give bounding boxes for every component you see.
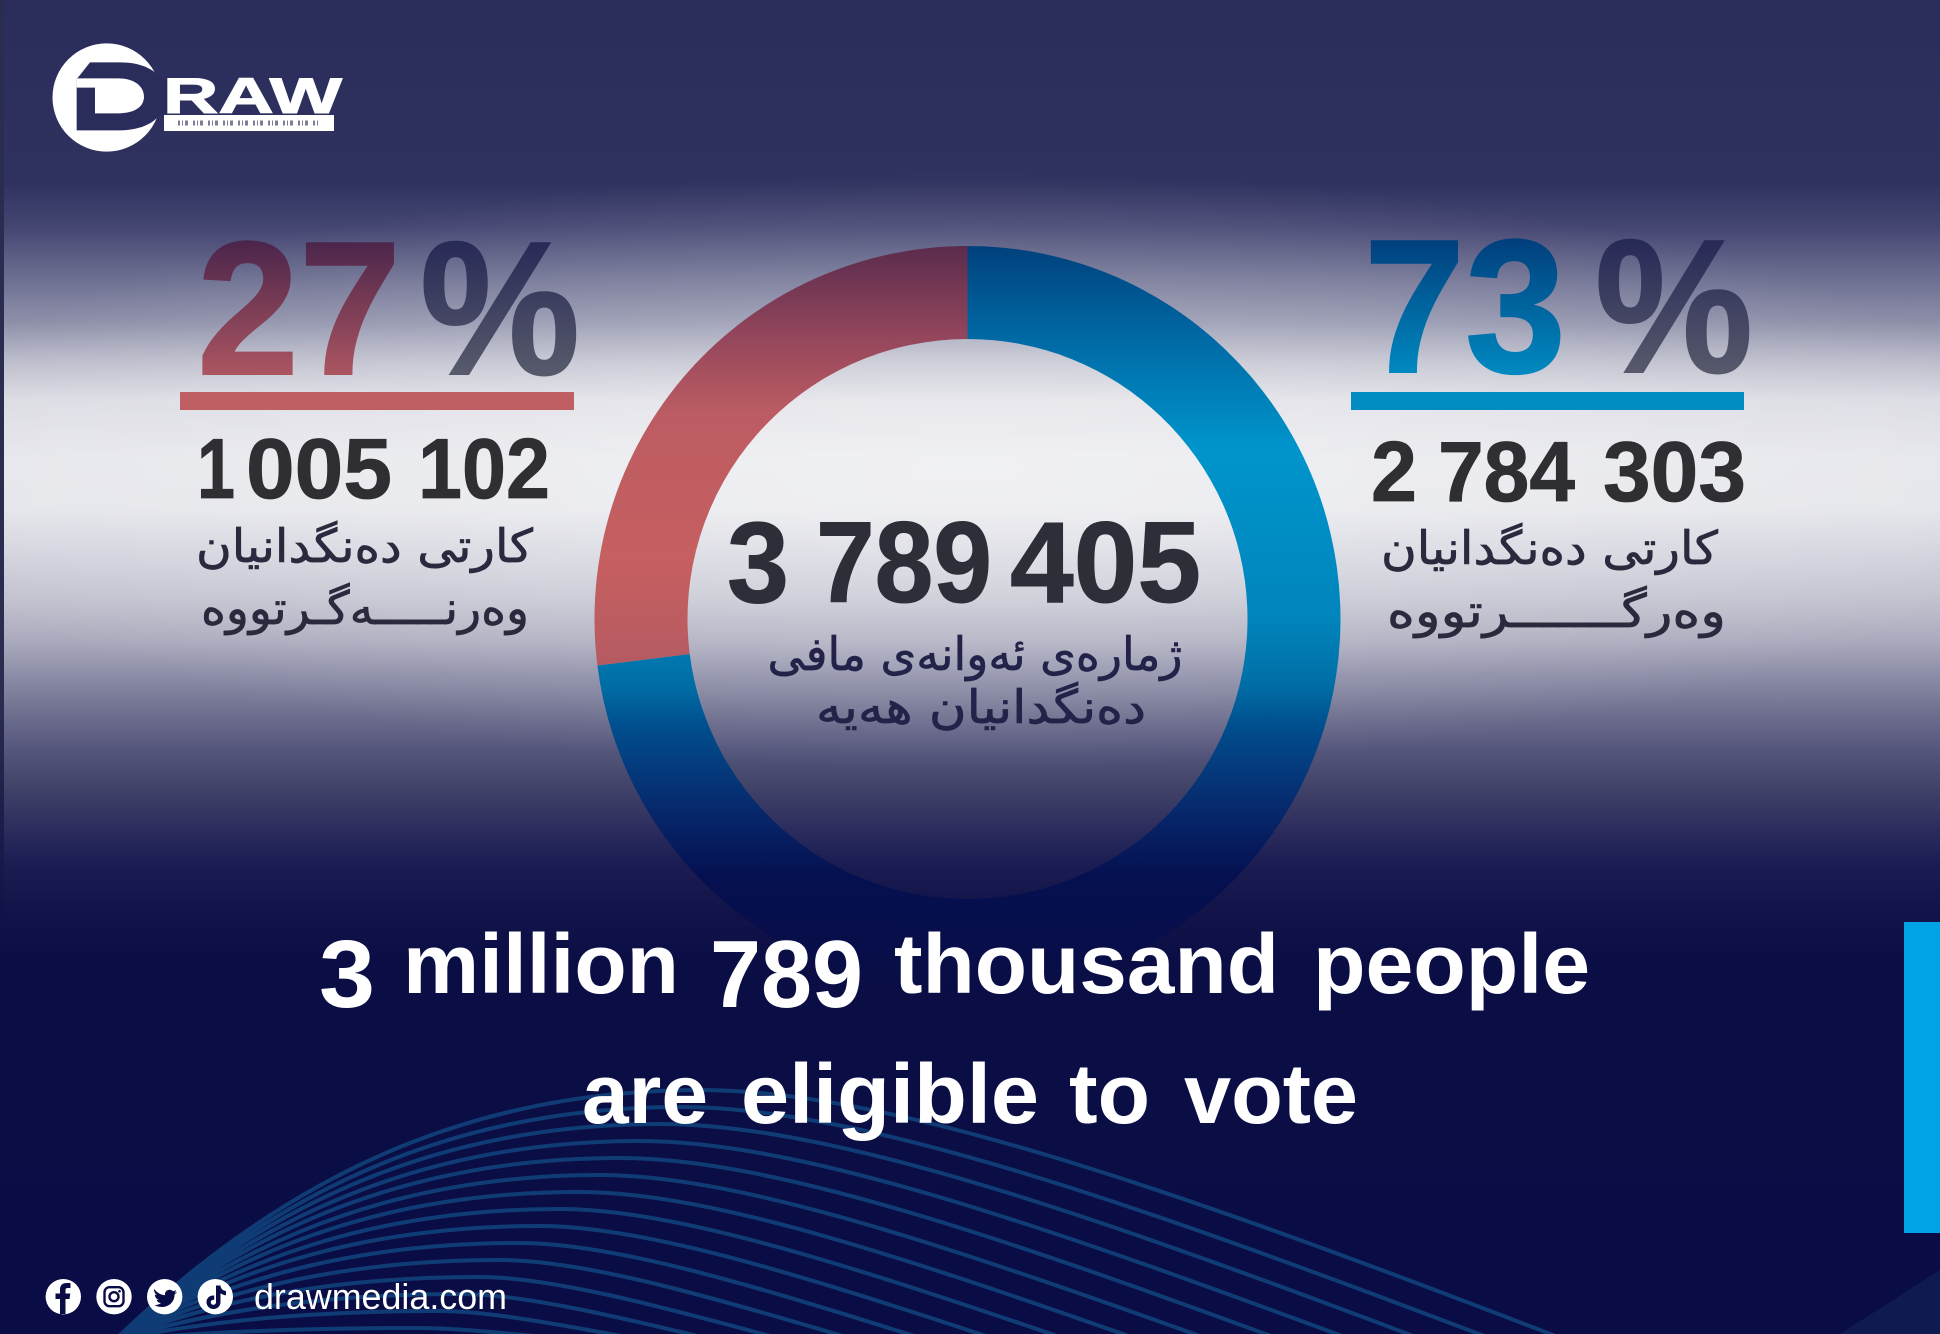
panel: 27% not received: [180, 203, 580, 636]
icon: facebook: [46, 1279, 81, 1314]
label: received voting cards: کارتی دەنگدانیان: [1381, 521, 1718, 575]
percentage 73: [1364, 201, 1753, 413]
logo emblem: [52, 43, 173, 152]
donut segment: 73% received: [597, 246, 1340, 992]
headline line 2: eligible: [741, 1047, 1039, 1141]
headline: [319, 917, 1590, 1141]
headline line 1: 3: [319, 921, 375, 1028]
headline line 2: to: [1069, 1047, 1150, 1141]
label: number of those eligible to vote: دەنگدانیان هەیە: [816, 680, 1146, 734]
blue side bar: [1904, 922, 1940, 1233]
headline line 1: thousand: [894, 917, 1279, 1011]
logo tagline bar: [164, 115, 334, 131]
center total: [727, 499, 1201, 734]
icon: tiktok: [198, 1279, 233, 1314]
total 3 789 405: 405: [1010, 499, 1201, 627]
count 2 784 303: [1371, 425, 1746, 520]
count 2 784 303: 784: [1438, 425, 1575, 520]
total 3 789 405: [727, 499, 1201, 627]
headline line 1: people: [1313, 917, 1590, 1011]
count 2 784 303: 303: [1603, 425, 1746, 520]
label: received voting cards: [1381, 521, 1726, 639]
headline line 1: 789: [710, 921, 863, 1028]
logo wordmark: RAW: [163, 68, 343, 124]
website: drawmedia.com: [254, 1276, 507, 1317]
total 3 789 405: 789: [816, 499, 992, 627]
percentage 73: %: [1595, 201, 1753, 413]
blue underline: [1351, 392, 1744, 410]
count 1 005 102: [197, 422, 550, 517]
icon: instagram: [96, 1279, 132, 1314]
donut chart: [594, 246, 1340, 992]
logo: DRAW: [52, 43, 343, 152]
count 2 784 303: 2: [1371, 425, 1417, 520]
label: received voting cards: وەرگـــــــرتووە: [1387, 584, 1726, 639]
panel: 73% received: [1351, 201, 1753, 639]
count 1 005 102: 102: [418, 422, 550, 517]
donut segment: 27% not received: [594, 246, 968, 666]
headline line 1: [319, 917, 1590, 1028]
percentage 27: [197, 203, 580, 415]
background wave lines: [115, 1090, 1566, 1334]
label: did not receive voting cards: کارتی دەنگدانیان: [196, 519, 533, 573]
count 1 005 102: 005: [246, 422, 392, 517]
footer: social icons and website: [46, 1276, 507, 1317]
label: number of those eligible to vote: [768, 627, 1182, 734]
total 3 789 405: 3: [727, 499, 789, 627]
headline line 1: million: [403, 917, 679, 1011]
label: did not receive voting cards: [196, 519, 533, 636]
count 1 005 102: 1: [197, 422, 235, 517]
percentage 27: %: [420, 203, 580, 415]
icon: twitter: [147, 1279, 182, 1314]
red underline: [180, 392, 574, 410]
percentage 27: 27: [197, 203, 401, 415]
headline line 2: are: [582, 1047, 708, 1141]
percentage 73: 73: [1364, 201, 1566, 413]
label: number of those eligible to vote: ژمارەی ئەوانەی مافی: [768, 627, 1182, 682]
headline line 2: vote: [1184, 1047, 1358, 1141]
headline line 2: [582, 1047, 1358, 1141]
label: did not receive voting cards: وەرنـــــەگـرتووە: [201, 581, 529, 636]
